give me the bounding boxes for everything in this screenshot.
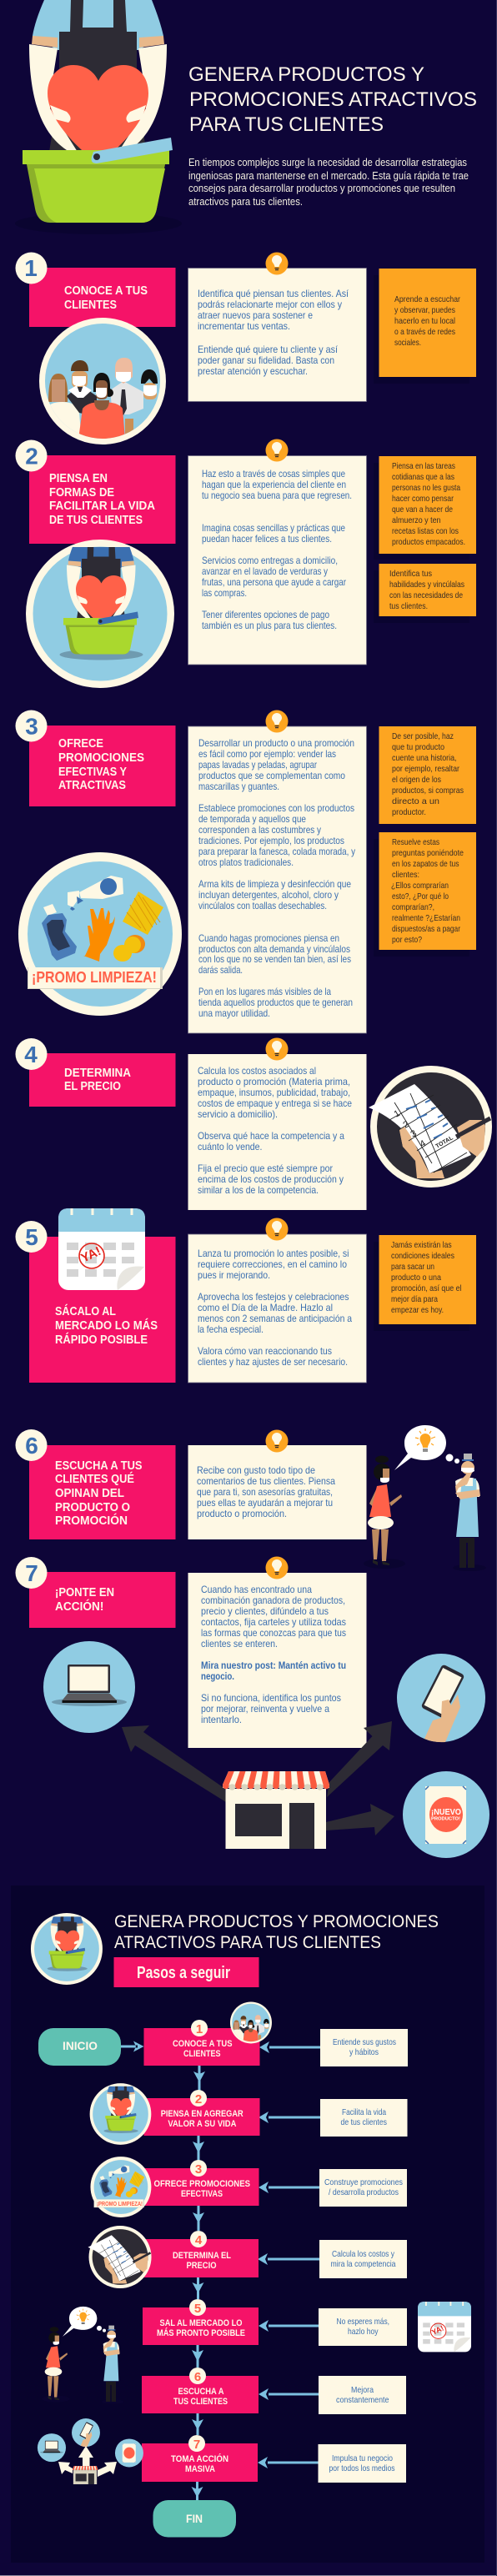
step 7 text card: negocio. (201, 1670, 234, 1682)
flow step 3: OFRECE PROMOCIONES (153, 2179, 250, 2189)
step 2 tip note: tareas cotidianas: Piensa en las tareas (392, 462, 455, 471)
step 1 text card (188, 269, 367, 402)
icon: light bulb (265, 439, 289, 462)
step 3 tip note: historia: directo a un (392, 797, 439, 806)
step 5 text card: Valora cómo van reaccionando tus (198, 1345, 332, 1357)
flow step 2 note (320, 2099, 407, 2137)
flow step 5 illustration: calendar (418, 2302, 471, 2352)
icon: light bulb (265, 1556, 289, 1579)
step 4 text card (188, 1054, 367, 1210)
flow step 6 illustration (42, 2307, 123, 2404)
step 7 heading box: ¡PONTE EN (55, 1586, 114, 1599)
flow step 2 note: Facilita la vida (342, 2108, 386, 2117)
summary title: ATRACTIVOS PARA TUS CLIENTES (114, 1933, 381, 1952)
icon: new product poster circle (403, 1771, 489, 1858)
step 6 text card: que para ti, son asesorías gratuitas, (197, 1486, 333, 1498)
inicio terminator: INICIO (63, 2040, 98, 2052)
step 2 text card: las compras. (202, 587, 247, 599)
flow step 6 (142, 2368, 259, 2413)
step 3 number badge: 3 (25, 714, 38, 739)
icon: light bulb (265, 252, 289, 275)
step 2 tip note: tareas cotidianas: personas no les gusta (392, 484, 460, 493)
step 1 tip note: y observar, puedes (394, 306, 455, 315)
step 4 text card: Observa qué hace la competencia y a (198, 1130, 344, 1142)
step 5 tip note: promoción, así que el (391, 1284, 462, 1293)
flow step 5 illustration: calendar: YA! (430, 2324, 445, 2337)
flow step 6 note: constantemente (336, 2396, 389, 2405)
step 2 text card: Servicios como entregas a domicilio, (202, 555, 338, 566)
step 7 text card: contactos, fija carteles y utiliza todas (201, 1616, 346, 1628)
panel: step 4 determina el precio (15, 1037, 492, 1210)
step 3 text card: con los que no se venden tan bien, así les (198, 953, 351, 965)
step 3 tip note: preguntas: comprarían?, (392, 903, 434, 912)
panel: step 3 ofrece promociones (15, 711, 476, 1033)
flow step 5 note: hazlo hoy (348, 2327, 379, 2337)
intro paragraph: consejos para desarrollar productos y promociones que resulten (188, 183, 455, 194)
step 4 heading box (29, 1053, 175, 1107)
panel: summary flow chart (11, 1886, 484, 2563)
step 1 text card: atraer nuevos para sostener e (198, 309, 313, 321)
icon: new product poster circle: PRODUCTO! (431, 1816, 460, 1821)
flow step 2: PIENSA EN AGREGAR (161, 2109, 243, 2119)
step 7 text card: intentarlo. (201, 1714, 242, 1725)
flow step 4 note: mira la competencia (330, 2260, 396, 2269)
step 1 text card: Identifica qué piensan tus clientes. Así (198, 288, 349, 299)
step 4 text card: cuánto lo vende. (198, 1141, 262, 1152)
step 5 text card: Lanza tu promoción lo antes posible, si (198, 1248, 349, 1259)
step 4 illustration: price sheet: 4 (419, 1138, 428, 1150)
step 3 tip note: preguntas: clientes: (392, 871, 419, 880)
step 3 text card: productos con alta demanda y vincúlalos (198, 943, 350, 955)
step 2 tip note: tareas cotidianas: hacer como pensar (392, 495, 454, 504)
step 5 text card: menos con 2 semanas de anticipación a (198, 1313, 352, 1324)
panel: step 6 escucha a tus clientes (15, 1425, 486, 1571)
intro paragraph: En tiempos complejos surge la necesidad de desarrollar estrategias (188, 157, 467, 168)
main title: PROMOCIONES ATRACTIVOS (189, 88, 477, 111)
step 1 text card: prestar atención y escuchar. (198, 365, 308, 377)
step 3 heading box: EFECTIVAS Y (58, 766, 127, 779)
flow step 3 note: / desarrolla productos (329, 2188, 399, 2197)
step 3 tip note: historia: De ser posible, haz (392, 732, 454, 741)
step 6 number badge (15, 1429, 47, 1461)
flow step 5 (143, 2299, 259, 2345)
step 2 text card (188, 455, 367, 665)
flow step 1: 1 (196, 2022, 203, 2036)
flow step 2: VALOR A SU VIDA (168, 2119, 237, 2129)
step 7 heading box: ACCIÓN! (55, 1599, 103, 1614)
fin terminator: FIN (186, 2513, 203, 2525)
step 5 heading box (29, 1237, 175, 1383)
step 5 tip note: mejor día para (391, 1295, 438, 1304)
step 6 heading box: PRODUCTO O (55, 1501, 130, 1514)
step 4 text card: Calcula los costos asociados al (198, 1065, 316, 1077)
step 4 number badge: 4 (24, 1042, 38, 1067)
step 4 illustration: price sheet: TOTAL (435, 1135, 454, 1150)
step 1 number badge (15, 252, 47, 284)
step 2 tip note: tareas cotidianas: almuerzo y ten (392, 516, 441, 525)
step 4 illustration: price sheet: 1 (392, 1108, 402, 1120)
step 1 text card: poder ganar su fidelidad. Basta con (198, 354, 334, 366)
step 2 tip note: habilidades: habilidades y vincúlalas (389, 580, 464, 590)
step 6 text card: comentarios de tus clientes. Piensa (197, 1475, 335, 1487)
step 2 heading box: PIENSA EN (49, 472, 108, 485)
step 3 number badge (15, 711, 47, 742)
step 4 text card: encima de los costos de producción y (198, 1173, 344, 1185)
flow step 1 note: Entiende sus gustos (333, 2038, 396, 2047)
step 3 tip note: historia: el origen de los (392, 776, 441, 785)
step 2 text card: puedan hacer felices a tus clientes. (202, 533, 332, 545)
step 5 tip note: condiciones ideales (391, 1252, 454, 1261)
icon: storefront (223, 1771, 329, 1849)
icon: light bulb (265, 711, 289, 732)
step 3 tip note: preguntas: Resuelve estas (392, 838, 439, 847)
step 3 heading box: ATRACTIVAS (58, 779, 126, 792)
step 1 number badge: 1 (24, 255, 38, 281)
inicio terminator (38, 2028, 121, 2066)
step 2 text card: Imagina cosas sencillas y prácticas que (202, 522, 345, 534)
intro paragraph (188, 157, 469, 208)
step 2 tip note: habilidades: con las necesidades de (389, 591, 463, 600)
step 2 tip note: tareas cotidianas: recetas listas con los (392, 527, 459, 536)
icon: phone in hand circle (397, 1654, 485, 1742)
flow step 4: DETERMINA EL (173, 2251, 231, 2261)
step 5 tip note (374, 1235, 476, 1331)
step 2 tip note: tareas cotidianas (374, 456, 476, 560)
step 7 text card: Cuando has encontrado una (201, 1584, 312, 1595)
flow step 7 note: Impulsa tu negocio (332, 2454, 393, 2463)
step 2 tip note: tareas cotidianas: que van a hacer de (392, 505, 453, 515)
step 5 heading box: RÁPIDO POSIBLE (55, 1333, 148, 1347)
step 6 heading box: ESCUCHA A TUS (55, 1459, 143, 1473)
step 6 heading box: CLIENTES QUÉ (55, 1472, 134, 1486)
step 3 text card: incluyan detergentes, alcohol, cloro y (198, 889, 339, 901)
step 3 tip note: historia: por ejemplo, resaltar (392, 765, 459, 774)
step 6 text card (188, 1445, 367, 1539)
panel: step 1 conoce a tus clientes (15, 252, 476, 446)
flow step 3: 3 (195, 2162, 202, 2177)
step 2 text card: frutas, una persona que ayude a cargar (202, 576, 346, 588)
flow step 6 note (319, 2376, 406, 2414)
flow step 3 illustration (90, 2157, 151, 2217)
step 1 tip note: Aprende a escuchar (394, 295, 460, 304)
step 3 illustration: cleaning kit promo: ¡PROMO LIMPIEZA! (32, 969, 157, 986)
step 3 text card: Arma kits de limpieza y desinfección que (198, 878, 351, 890)
step 5 text card (188, 1234, 367, 1383)
step 4 number badge (15, 1038, 47, 1070)
step 3 heading box: PROMOCIONES (58, 751, 144, 765)
panel: step 2 facilitar la vida (15, 439, 476, 688)
icon: light bulb (265, 1429, 289, 1453)
summary illustration (31, 1913, 103, 1985)
step 6 heading box (29, 1445, 175, 1539)
flow step 6: ESCUCHA A (178, 2387, 224, 2397)
main title: GENERA PRODUCTOS Y (188, 63, 424, 86)
flow step 4 illustration (88, 2226, 152, 2288)
step 4 text card: Fija el precio que esté siempre por (198, 1162, 333, 1174)
step 2 tip note: tareas cotidianas: productos empacados. (392, 538, 465, 547)
step 2 illustration: heart and basket in circle (26, 540, 174, 688)
flow step 2 illustration (90, 2083, 151, 2145)
step 4 text card: costos de empaque y entrega si se hace (198, 1097, 352, 1109)
flow step 5: MÁS PRONTO POSIBLE (157, 2327, 245, 2338)
step 2 heading box: FORMAS DE (49, 486, 114, 500)
step 3 text card: tienda aquellos productos que te generan (198, 997, 353, 1008)
flow step 3 note (319, 2169, 407, 2207)
step 7 text card (188, 1573, 367, 1748)
step 3 text card: una mayor utilidad. (198, 1007, 270, 1019)
step 3 tip note: preguntas: esto?, ¿Por qué lo (392, 892, 449, 901)
step 7 text card: clientes se enteren. (201, 1638, 278, 1650)
step 2 tip note: habilidades: tus clientes. (389, 602, 428, 611)
step 1 heading box: CONOCE A TUS (64, 284, 148, 298)
step 3 text card: Cuando hagas promociones piensa en (198, 932, 339, 944)
step 3 heading box (29, 726, 175, 806)
step 5 text card: Aprovecha los festejos y celebraciones (198, 1291, 349, 1303)
panel: step 5 sácalo al mercado (15, 1208, 476, 1383)
step 2 number badge: 2 (25, 444, 38, 469)
step 2 number badge (15, 440, 47, 472)
flow step 7: MASIVA (185, 2464, 215, 2474)
flow step 7 illustration: store broadcasting to channels (38, 2418, 143, 2484)
step 1 tip note (374, 269, 476, 384)
step 3 text card: darás salida. (198, 964, 243, 976)
main title (188, 63, 477, 136)
step 7 number badge: 7 (25, 1560, 38, 1586)
step 5 illustration: calendar (58, 1208, 145, 1290)
step 5 text card: como el Día de la Madre. Hazlo al (198, 1302, 333, 1313)
flow step 3 note: Construye promociones (324, 2178, 403, 2187)
step 5 tip note: para sacar un (391, 1263, 434, 1272)
step 3 tip note: preguntas: preguntas poniéndote (392, 849, 464, 858)
step 2 tip note: habilidades: Identifica tus (389, 570, 432, 579)
step 1 text card: podrás relacionarte mejor con ellos y (198, 299, 342, 310)
step 3 tip note: historia: productor. (392, 808, 426, 817)
step 4 text card: producto o promoción (Materia prima, (198, 1076, 350, 1087)
step 1 text card: Entiende qué quiere tu cliente y así (198, 344, 339, 355)
step 4 illustration: price sheet (369, 1066, 492, 1188)
flow step 3 illustration: ¡PROMO LIMPIEZA! (97, 2202, 143, 2207)
step 3 tip note: preguntas (374, 832, 476, 957)
flow step 1: CLIENTES (183, 2049, 220, 2059)
flow step 5: 5 (194, 2302, 201, 2316)
step 3 tip note: preguntas: ¿Ellos comprarían (391, 881, 449, 891)
step 3 text card (188, 726, 367, 1033)
step 3 text card: tradiciones. Por ejemplo, los productos (198, 835, 344, 846)
flow step 6: TUS CLIENTES (173, 2397, 228, 2407)
step 7 text card: Si no funciona, identifica los puntos (201, 1692, 341, 1704)
flow step 6 note: Mejora (351, 2386, 374, 2395)
flow step 3: EFECTIVAS (181, 2189, 223, 2199)
flow step 7: 7 (193, 2438, 200, 2452)
step 7 number badge (15, 1557, 47, 1589)
step 7 text card: precio y clientes, difúndelo a tus (201, 1605, 329, 1617)
step 4 illustration: price sheet: 3 (409, 1128, 419, 1140)
flow step 7 note: por todos los medios (329, 2464, 395, 2473)
flow step 4 note: Calcula los costos y (332, 2250, 395, 2259)
icon: light bulb (265, 1037, 289, 1061)
flow step 7 note (319, 2444, 406, 2483)
step 4 heading box: DETERMINA (64, 1067, 131, 1080)
flow step 1 note (320, 2029, 408, 2066)
step 3 text card: productos que se complementan como (198, 770, 345, 781)
intro paragraph: atractivos para tus clientes. (188, 196, 303, 208)
step 6 illustration: customer and shopkeeper talking (364, 1425, 486, 1571)
main title: PARA TUS CLIENTES (189, 113, 384, 136)
step 7 text card: las formas que conozcas para que tus (201, 1627, 346, 1639)
step 6 heading box: PROMOCIÓN (55, 1513, 128, 1528)
step 3 heading box: OFRECE (58, 737, 103, 751)
step 5 text card: clientes y haz ajustes de ser necesario. (198, 1356, 348, 1368)
step 2 heading box: DE TUS CLIENTES (49, 514, 143, 527)
step 5 tip note: Jamás existirán las (391, 1241, 452, 1250)
flow step 2 note: de tus clientes (340, 2118, 387, 2127)
step 2 text card: Haz esto a través de cosas simples que (202, 468, 345, 480)
step 1 tip note: hacerlo en tu local (394, 317, 455, 326)
step 1 tip note: sociales. (394, 339, 421, 348)
flow step 2: 2 (195, 2092, 202, 2106)
flow step 4: PRECIO (187, 2261, 217, 2271)
step 2 text card: Tener diferentes opciones de pago (202, 609, 329, 620)
flow step 1 note: y hábitos (349, 2048, 379, 2057)
step 7 text card: combinación ganadora de productos, (201, 1594, 345, 1606)
step 1 illustration: masked customers (39, 318, 167, 446)
step 3 tip note: preguntas: en los zapatos de tus (392, 860, 459, 869)
intro paragraph: ingeniosas para mantenerse en el mercado. Esta guía rápida te trae (188, 170, 469, 182)
step 3 text card: Pon en los lugares más visibles de la (198, 986, 331, 997)
step 2 text card: hagan que la experiencia del cliente en (202, 479, 346, 490)
flow step 7 (142, 2435, 258, 2482)
step 3 text card: vincúlalos con toallas desechables. (198, 900, 327, 911)
flow step 1: CONOCE A TUS (173, 2039, 232, 2049)
step 7 text card: Mira nuestro post: Mantén activo tu (201, 1660, 346, 1671)
flow step 5 note (319, 2308, 407, 2346)
step 3 text card: Desarrollar un producto o una promoción (198, 737, 354, 749)
step 5 tip note: empezar es hoy. (391, 1306, 444, 1315)
panel: step 7 ponte en acción (15, 1556, 489, 1858)
step 2 text card: avanzar en el lavado de verduras y (202, 565, 328, 577)
step 3 text card: para preparar la fanesca, colada morada, y (198, 846, 355, 857)
arrow: store to phone (327, 1721, 392, 1797)
flow step 6: 6 (194, 2370, 201, 2384)
step 1 text card: incrementar tus ventas. (198, 320, 290, 332)
flow step 3 (143, 2160, 259, 2206)
step 3 text card: Establece promociones con los productos (198, 802, 354, 814)
step 4 text card: servicio a domicilio). (198, 1108, 278, 1120)
flow step 7: TOMA ACCIÓN (171, 2453, 228, 2464)
flow step 1 illustration (230, 2001, 272, 2044)
step 1 heading box (29, 268, 175, 327)
step 7 text card: por mejorar, reinventa y vuelve a (201, 1703, 329, 1715)
step 3 illustration: cleaning kit promo (18, 852, 182, 1016)
step 5 tip note: producto o una (391, 1273, 441, 1283)
flow step 4 note (319, 2240, 407, 2278)
flow step 5: SAL AL MERCADO LO (160, 2318, 242, 2328)
step 5 text card: requiere correcciones, en el camino lo (198, 1258, 347, 1270)
step 6 text card: Recibe con gusto todo tipo de (197, 1464, 315, 1476)
step 2 heading box: FACILITAR LA VIDA (49, 500, 155, 513)
step 6 number badge: 6 (25, 1433, 38, 1459)
step 3 text card: otros platos tradicionales. (198, 856, 294, 868)
step 5 number badge: 5 (25, 1224, 38, 1250)
step 3 text card: papas lavadas y peladas, agrupar (198, 759, 317, 771)
step 4 illustration: price sheet: 2 (402, 1119, 411, 1131)
arrow: store to laptop (122, 1725, 226, 1802)
step 4 text card: empaque, insumos, publicidad, trabajo, (198, 1087, 350, 1098)
pasos a seguir banner: Pasos a seguir (137, 1964, 230, 1982)
icon: light bulb (265, 1218, 289, 1241)
flow step 2 (143, 2090, 260, 2136)
step 2 tip note: tareas cotidianas: cotidianas que a las (392, 473, 454, 482)
flow arrows (121, 2041, 320, 2502)
fin terminator (153, 2500, 236, 2537)
step 3 tip note: preguntas: realmente ?¿Estarían (392, 914, 460, 923)
step 3 tip note: historia (379, 726, 476, 824)
step 4 text card: similar a los de la competencia. (198, 1184, 319, 1196)
step 3 tip note: historia: cuente una historia, (392, 754, 457, 763)
header illustration: hands holding heart over basket (15, 0, 182, 234)
step 2 tip note: habilidades (374, 564, 476, 623)
step 5 text card: pues ir mejorando. (198, 1269, 270, 1281)
pasos a seguir banner (113, 1957, 259, 1987)
step 3 text card: es fácil como por ejemplo: vender las (198, 748, 336, 760)
step 1 heading box: CLIENTES (64, 299, 117, 312)
step 2 text card: tu negocio sea buena para que regresen. (202, 490, 352, 501)
step 6 text card: producto o promoción. (197, 1508, 287, 1519)
step 3 text card: corresponden a las costumbres y (198, 824, 321, 836)
summary title: GENERA PRODUCTOS Y PROMOCIONES (114, 1912, 439, 1931)
step 5 text card: la fecha especial. (198, 1323, 264, 1335)
step 5 heading box: MERCADO LO MÁS (55, 1318, 158, 1333)
step 7 heading box (29, 1572, 175, 1628)
flow step 4 (143, 2231, 259, 2277)
flow step 4: 4 (195, 2233, 203, 2247)
step 2 heading box (29, 455, 175, 544)
step 6 heading box: OPINAN DEL (55, 1487, 124, 1500)
icon: new product poster circle: ¡NUEVO (431, 1807, 461, 1817)
icon: laptop circle (43, 1641, 135, 1733)
step 1 tip note: o a través de redes (394, 328, 455, 337)
step 2 text card: también es un plus para tus clientes. (202, 620, 337, 631)
step 4 heading box: EL PRECIO (64, 1080, 121, 1093)
step 5 illustration: calendar: YA! (79, 1244, 103, 1266)
summary title (114, 1912, 439, 1952)
step 3 tip note: historia: que tu producto (392, 743, 444, 752)
step 3 text card: mascarillas y guantes. (198, 781, 279, 792)
step 5 number badge (15, 1221, 47, 1253)
arrow: store to poster (326, 1804, 394, 1835)
step 3 text card: de temporada y aquellos que (198, 813, 306, 825)
step 6 text card: pues ellas te ayudarán a mejorar tu (197, 1497, 333, 1509)
step 3 tip note: preguntas: por esto? (392, 936, 422, 945)
flow step 1 (143, 2020, 260, 2066)
step 3 tip note: historia: productos, si compras (392, 786, 464, 796)
flow step 5 note: No esperes más, (337, 2317, 389, 2327)
step 3 tip note: preguntas: dispuestos/as a pagar (392, 925, 460, 934)
step 5 heading box: SÁCALO AL (55, 1304, 116, 1318)
